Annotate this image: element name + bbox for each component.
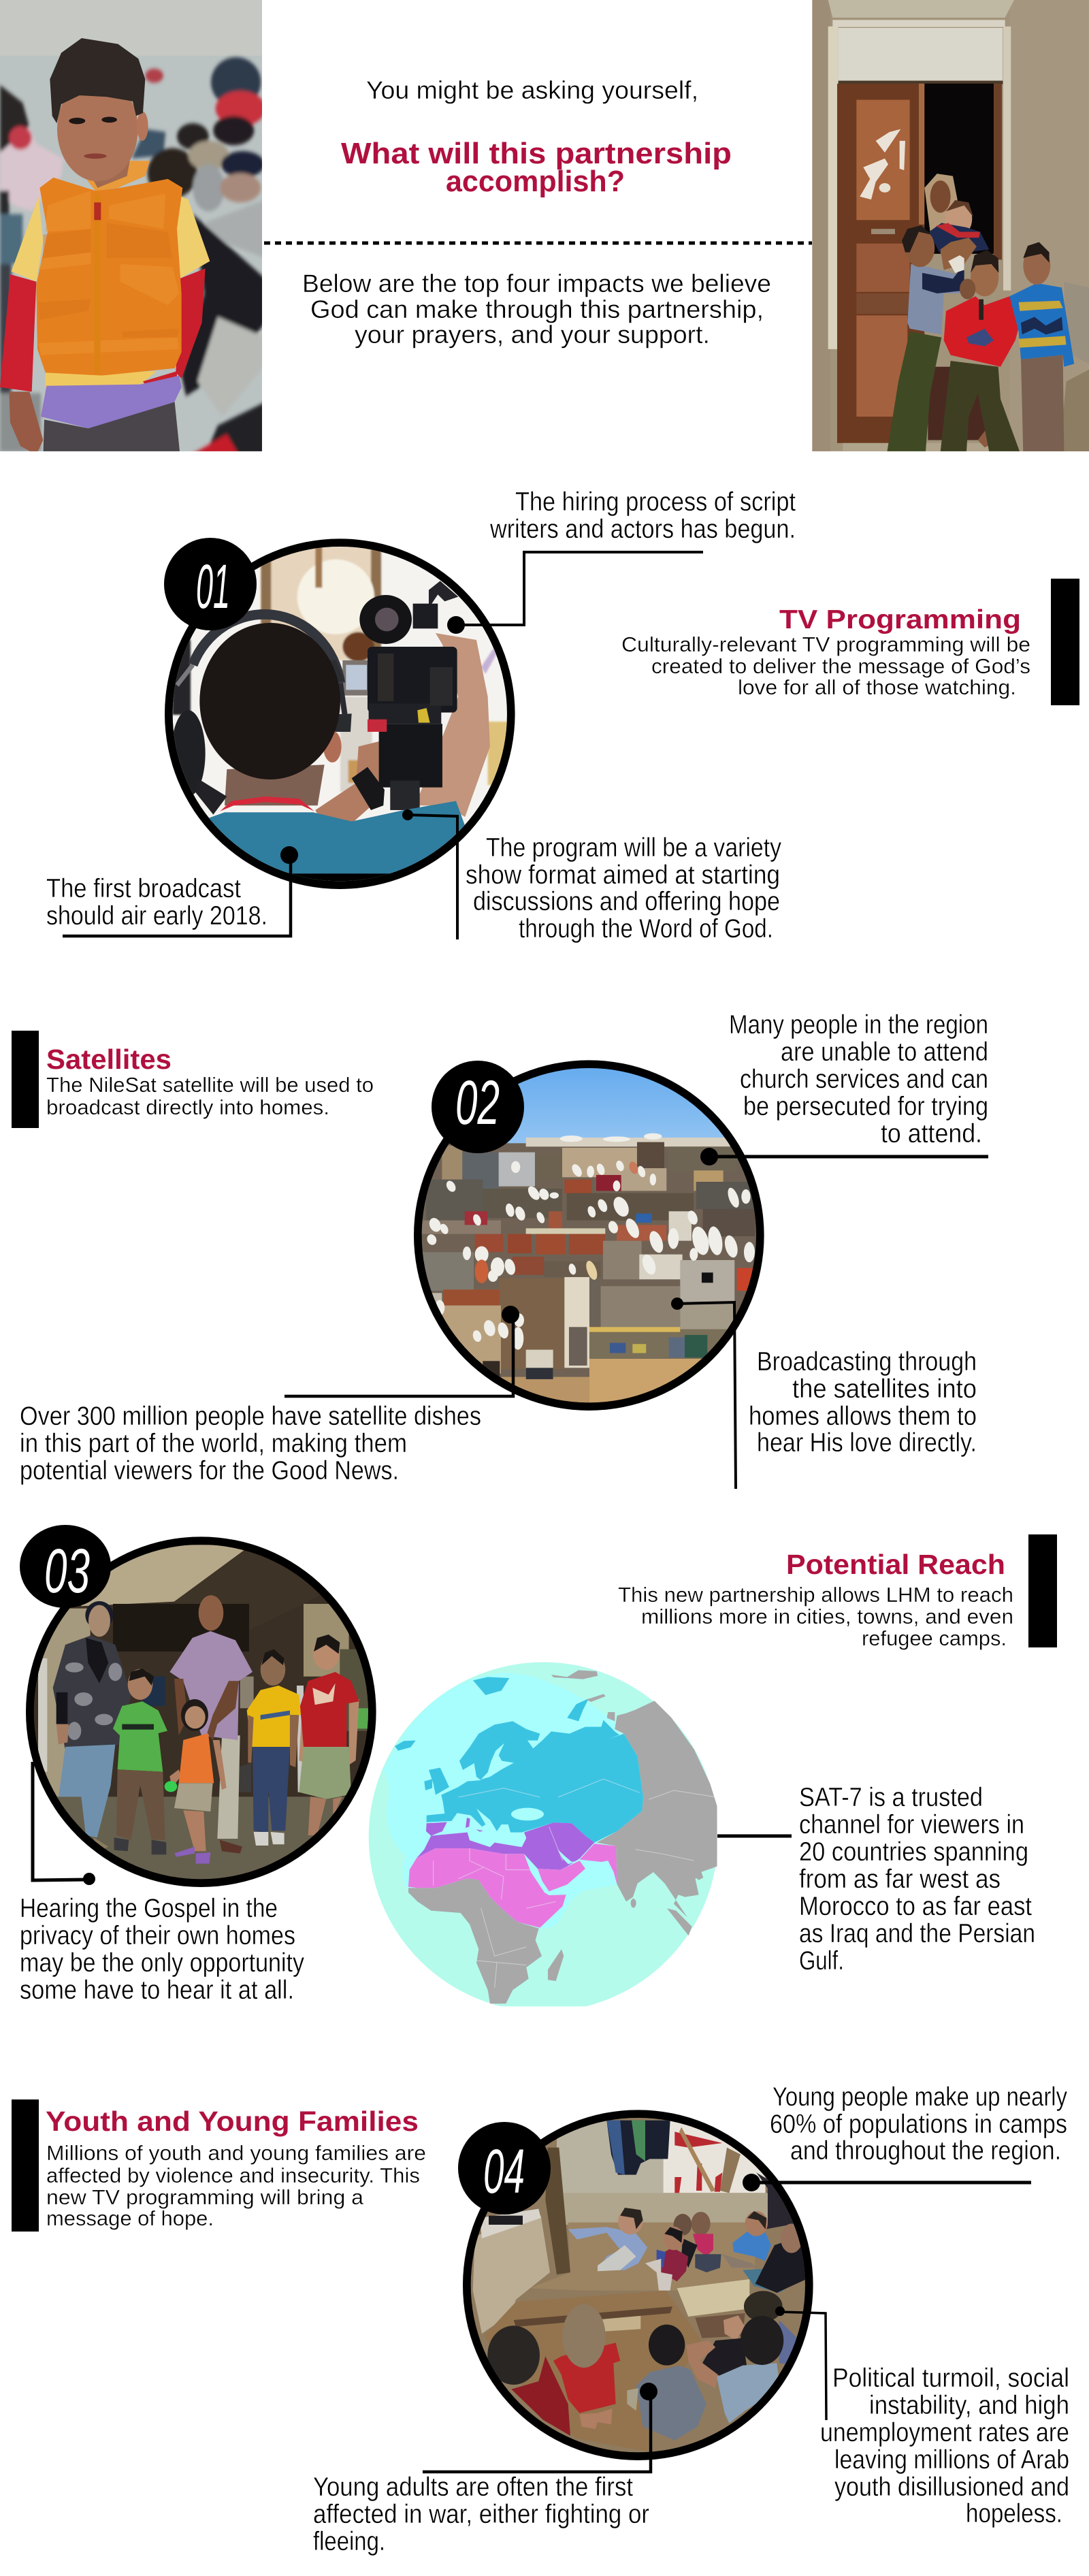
description: TV programming: Culturally-relevant TV programming will be	[621, 632, 1030, 656]
callout: political turmoil: hopeless.	[966, 2499, 1062, 2528]
description: youth and young families: affected by violence and insecurity. This	[46, 2163, 420, 2187]
heading: what will this partnership accomplish	[341, 137, 732, 198]
title: potential reach: Potential Reach	[786, 1549, 1005, 1580]
callout: hiring process: writers and actors has begun.	[489, 515, 796, 544]
panel: 01 TV programming	[46, 487, 1079, 944]
photo: boy in orange vest	[0, 0, 265, 457]
map: SAT-7 coverage globe	[369, 1662, 718, 2012]
badge: 04	[458, 2122, 551, 2215]
callout: political turmoil	[820, 2364, 1069, 2528]
description: youth and young families	[46, 2141, 426, 2230]
callout: 300 million: Over 300 million people have satellite dishes	[20, 1402, 481, 1431]
callout: broadcasting: Broadcasting through	[757, 1347, 977, 1376]
panel: 04 youth and young families	[12, 2082, 1069, 2556]
photo circle: rooftops with satellite dishes	[412, 1059, 766, 1415]
callout: political turmoil: instability, and high	[869, 2391, 1069, 2420]
callout: political turmoil: Political turmoil, social	[832, 2364, 1069, 2393]
dotted divider	[264, 241, 812, 245]
callout: broadcasting: hear His love directly.	[757, 1428, 977, 1458]
badge: 01: 01	[196, 552, 230, 622]
badge: 03	[20, 1525, 111, 1608]
callout: persecuted: be persecuted for trying	[743, 1092, 988, 1121]
connector: SAT-7	[717, 1834, 792, 1838]
badge: 03: 03	[44, 1536, 90, 1606]
photo circle: family of six	[25, 1536, 378, 1890]
accent bar	[1051, 579, 1079, 705]
intro paragraph: your prayers, and your support.	[355, 321, 710, 349]
callout: SAT-7: Gulf.	[799, 1946, 844, 1976]
description: satellites	[46, 1073, 374, 1119]
description: youth and young families: message of hope.	[46, 2206, 214, 2230]
callout: first broadcast: should air early 2018.	[46, 901, 267, 931]
callout: young adults	[313, 2473, 649, 2556]
header section	[0, 0, 1089, 457]
description: satellites: broadcast directly into homes.	[46, 1095, 329, 1119]
callout: hiring process: The hiring process of script	[515, 487, 796, 517]
description: youth and young families: Millions of youth and young families are	[46, 2141, 426, 2165]
callout: privacy: privacy of their own homes	[20, 1921, 295, 1950]
callout: first broadcast: The first broadcast	[46, 874, 241, 903]
heading: what will this partnership accomplish: What will this partnership	[341, 137, 732, 170]
callout: privacy: some have to hear it at all.	[20, 1976, 294, 2005]
description: TV programming: love for all of those watching.	[738, 675, 1016, 699]
callout: broadcasting	[749, 1347, 977, 1458]
panel: 02 satellites	[12, 1010, 988, 1489]
panel: 03 potential reach	[20, 1525, 1057, 2012]
callout: 300 million: in this part of the world, making them	[20, 1429, 407, 1458]
accent bar	[12, 2099, 39, 2232]
accent bar	[1028, 1534, 1057, 1647]
connector: privacy	[33, 1762, 95, 1885]
title: TV programming: TV Programming	[779, 605, 1021, 634]
callout: 60 percent	[770, 2082, 1067, 2166]
connector: hiring process	[447, 552, 703, 634]
callout: hiring process	[489, 487, 796, 544]
connector: variety show	[402, 809, 457, 939]
callout: variety show: The program will be a variety	[486, 833, 781, 863]
callout: privacy	[20, 1894, 304, 2005]
photo circle: children seated on carpets	[461, 2109, 815, 2463]
connector: first broadcast	[63, 846, 298, 936]
description: TV programming: created to deliver the message of God’s	[651, 654, 1030, 678]
callout: broadcasting: the satellites into	[792, 1374, 977, 1404]
photo circle: camera operator	[163, 538, 517, 892]
description: potential reach	[618, 1583, 1013, 1650]
connector: 300 million	[285, 1306, 519, 1396]
connector: 60 percent	[743, 2174, 1031, 2191]
callout: 300 million: potential viewers for the Good News.	[20, 1456, 399, 1485]
connector: persecuted	[700, 1148, 988, 1165]
callout: privacy: may be the only opportunity	[20, 1948, 304, 1978]
callout: SAT-7: 20 countries spanning	[799, 1837, 1028, 1867]
badge: 02: 02	[455, 1068, 500, 1138]
callout: persecuted: are unable to attend	[781, 1037, 988, 1067]
accent bar	[12, 1031, 39, 1128]
intro paragraph	[302, 270, 771, 349]
intro paragraph: Below are the top four impacts we believe	[302, 270, 771, 297]
callout: variety show: through the Word of God.	[519, 914, 773, 944]
description: satellites: The NileSat satellite will be used to	[46, 1073, 374, 1097]
callout: SAT-7: from as far west as	[799, 1865, 1001, 1894]
badge: 04: 04	[483, 2137, 525, 2206]
callout: 300 million	[20, 1402, 481, 1485]
callout: young adults: Young adults are often the first	[313, 2473, 633, 2502]
connector: broadcasting	[671, 1298, 736, 1489]
photo: family at doorway	[810, 0, 1089, 457]
heading: what will this partnership accomplish: accomplish?	[446, 165, 625, 198]
description: TV programming	[621, 632, 1030, 699]
badge: 02	[432, 1061, 524, 1153]
description: youth and young families: new TV programming will bring a	[46, 2185, 364, 2209]
connector: young adults	[423, 2383, 657, 2472]
callout: persecuted: to attend.	[881, 1119, 982, 1148]
callout: variety show	[466, 833, 781, 944]
callout: privacy: Hearing the Gospel in the	[20, 1894, 278, 1923]
callout: young adults: affected in war, either fighting or	[313, 2500, 649, 2529]
callout: young adults: fleeing.	[313, 2527, 385, 2556]
title: satellites: Satellites	[46, 1044, 172, 1075]
description: potential reach: This new partnership allows LHM to reach	[618, 1583, 1013, 1607]
callout: first broadcast	[46, 874, 267, 931]
callout: persecuted: Many people in the region	[729, 1010, 988, 1040]
callout: SAT-7: SAT-7 is a trusted	[799, 1783, 983, 1812]
title: youth and young families: Youth and Young Families	[46, 2106, 419, 2137]
callout: SAT-7: Morocco to as far east	[799, 1892, 1032, 1921]
callout: SAT-7	[799, 1783, 1035, 1976]
callout: persecuted: church services and can	[740, 1065, 988, 1094]
heading: you might be asking: You might be asking yourself,	[366, 76, 698, 104]
callout: persecuted	[729, 1010, 988, 1148]
callout: SAT-7: as Iraq and the Persian	[799, 1919, 1035, 1948]
callout: variety show: show format aimed at starting	[466, 860, 780, 890]
callout: variety show: discussions and offering hope	[473, 887, 780, 916]
connector: political turmoil	[775, 2306, 826, 2420]
intro paragraph: God can make through this partnership,	[310, 295, 764, 323]
description: potential reach: refugee camps.	[862, 1626, 1007, 1650]
badge: 01	[164, 538, 257, 630]
description: potential reach: millions more in cities, towns, and even	[641, 1605, 1013, 1628]
callout: broadcasting: homes allows them to	[749, 1402, 977, 1431]
callout: SAT-7: channel for viewers in	[799, 1810, 1024, 1839]
